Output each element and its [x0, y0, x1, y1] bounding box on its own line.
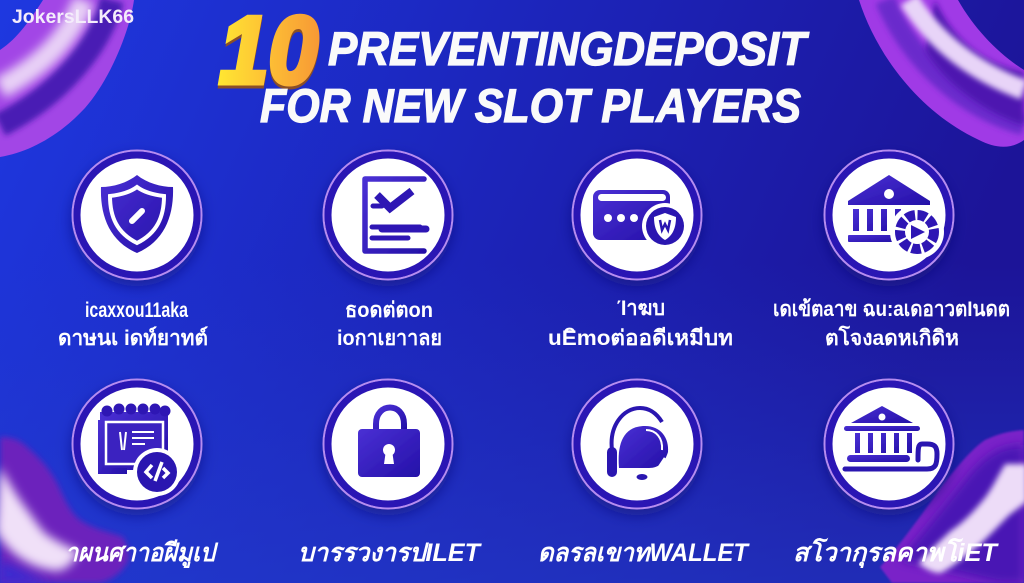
item 5: calendar [65, 380, 219, 568]
label line 2: ตโจงaดหเกิดิห [825, 325, 959, 350]
icon: shield [72, 150, 202, 280]
icon: checklist document [324, 150, 452, 280]
brand logo text: JokersLLK66 [12, 7, 134, 28]
icon: padlock [324, 380, 452, 508]
icon: calendar [72, 380, 202, 508]
label line 1: icaxxou11aka [85, 299, 188, 322]
decoration: top-right purple tube [855, 0, 1024, 150]
icon: payment card with shield [572, 150, 702, 280]
label line 1: ธoดต่ตon [345, 299, 433, 322]
item 1: shield [58, 150, 208, 350]
label: าผนศาาอฝีมูเป [65, 539, 219, 568]
icon: support headset [572, 380, 702, 508]
label: บารรวงารปILET [298, 539, 483, 567]
label line 2: uEิmoต่ออดีเหมีบท [548, 326, 733, 350]
icon: bank [824, 380, 954, 508]
decoration: bottom-left purple blob [0, 437, 129, 583]
label: ดลรลเขาทWALLET [538, 539, 751, 567]
label line 1: Ίาฆบ [617, 297, 665, 320]
title number 10: 10 [219, 0, 318, 107]
item 8: bank with wallet curl [793, 380, 1000, 568]
icon: bank and gear [824, 150, 954, 280]
label line 2: ioกาเยาาลย [337, 327, 442, 350]
title [219, 0, 810, 132]
item 7: headset [538, 380, 751, 567]
label: สโวากุรลคาพโiET [793, 537, 1000, 568]
decoration: top-left purple tube [0, 0, 140, 160]
label line 2: ดาษนเ iดท์ยาทต์ [58, 326, 208, 350]
decoration: bottom-right purple blob [880, 430, 1024, 583]
item 6: lock [298, 380, 483, 567]
item 4: bank with gear [773, 150, 1010, 350]
item 2: checklist [324, 150, 452, 350]
item 3: card [548, 150, 733, 350]
title number 10: 10 [219, 0, 318, 104]
title line 2: FOR NEW SLOT PLAYERS [260, 79, 801, 132]
title line 1: PREVENTINGDEPOSIT [328, 22, 810, 75]
